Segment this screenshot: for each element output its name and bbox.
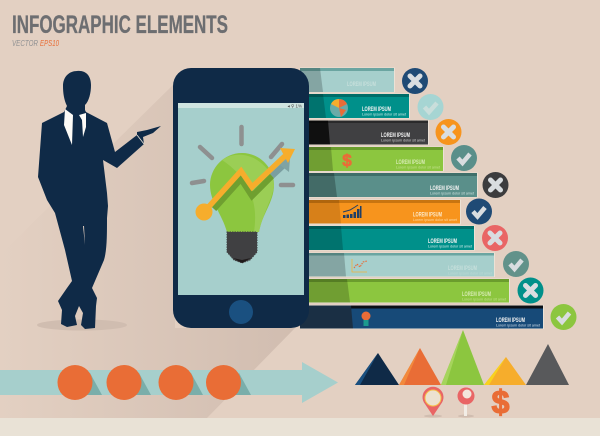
- bar 7: LOREM IPSUM: [428, 239, 457, 245]
- bar 9: LOREM IPSUM: [462, 292, 491, 298]
- bar 9: Lorem ipsum dolor sit amet: [462, 298, 506, 302]
- bar 2: Lorem ipsum dolor sit amet: [362, 112, 406, 116]
- long shadow: [0, 83, 295, 418]
- title: [12, 11, 228, 48]
- circle 10: [550, 304, 576, 330]
- bar 5: LOREM IPSUM: [430, 186, 459, 192]
- circle 2: [418, 94, 444, 120]
- bar 2: LOREM IPSUM: [362, 107, 391, 113]
- icon: line chart: [352, 259, 367, 272]
- bar 6: [300, 200, 461, 224]
- phone: [173, 68, 309, 328]
- icon: push pin: [458, 388, 474, 418]
- bar 8: Lorem ipsum dolor sit amet: [448, 272, 492, 276]
- bottom band: [0, 418, 600, 436]
- title: VECTOR: [12, 39, 38, 48]
- bar 8: LOREM IPSUM: [448, 266, 477, 272]
- status text: ◂ ⚲ 1%: [287, 104, 302, 108]
- title: INFOGRAPHIC ELEMENTS: [12, 11, 228, 39]
- chart arrow: [196, 148, 295, 220]
- title: EPS10: [40, 39, 59, 48]
- circle 9: [518, 278, 544, 304]
- orange triangle: [399, 348, 441, 385]
- rays: [192, 127, 293, 185]
- circle 5: [482, 172, 508, 198]
- bar 6: Lorem ipsum dolor sit amet: [413, 218, 457, 222]
- circle 4: [451, 145, 477, 171]
- bar 10: LOREM IPSUM: [496, 318, 525, 324]
- light bulb graphic: [192, 127, 295, 263]
- grey triangle: [526, 344, 569, 385]
- circle 3: [436, 119, 462, 145]
- icon: large dollar: $: [492, 384, 510, 420]
- bar 4: [300, 146, 444, 172]
- bar 4: Lorem ipsum dolor sit amet: [396, 166, 440, 170]
- green triangle: [441, 330, 484, 385]
- icon: dollar: $: [342, 151, 352, 170]
- bar 4: LOREM IPSUM: [396, 160, 425, 166]
- bar 3: LOREM IPSUM: [381, 133, 410, 139]
- bar 6: LOREM IPSUM: [413, 212, 442, 218]
- bar 2: [300, 94, 410, 118]
- bar 3: [300, 120, 429, 145]
- bar 5: [300, 172, 478, 198]
- bar 1: LOREM IPSUM: [347, 82, 376, 88]
- timeline markers: [80, 373, 251, 395]
- home button: [229, 300, 253, 324]
- bar 1: [300, 68, 395, 92]
- timeline arrow: [0, 362, 338, 403]
- bulb base: [227, 232, 257, 263]
- status circles: [402, 68, 576, 330]
- triangles: [355, 330, 569, 385]
- bar 7: Lorem ipsum dolor sit amet: [428, 244, 472, 248]
- bar 10: Lorem ipsum dolor sit amet: [496, 324, 540, 328]
- bar 5: Lorem ipsum dolor sit amet: [430, 192, 474, 196]
- bar 3: Lorem ipsum dolor sit amet: [381, 138, 425, 142]
- circle 1: [402, 68, 428, 94]
- icon: bar chart: [343, 205, 362, 218]
- circle 6: [466, 198, 492, 224]
- yellow triangle: [484, 357, 526, 385]
- bar 8: [300, 252, 495, 277]
- icon: map pin: [423, 387, 444, 418]
- businessman silhouette: [37, 71, 161, 330]
- navy triangle: [355, 353, 399, 385]
- circle 8: [503, 251, 529, 277]
- chart arrow shadow: [214, 176, 272, 209]
- bar 10: [300, 305, 544, 329]
- icon: small bulb: [362, 312, 370, 326]
- bar 7: [300, 226, 475, 250]
- icon: pie globe: [330, 99, 348, 117]
- circle 7: [482, 225, 508, 251]
- bar 9: [300, 278, 510, 303]
